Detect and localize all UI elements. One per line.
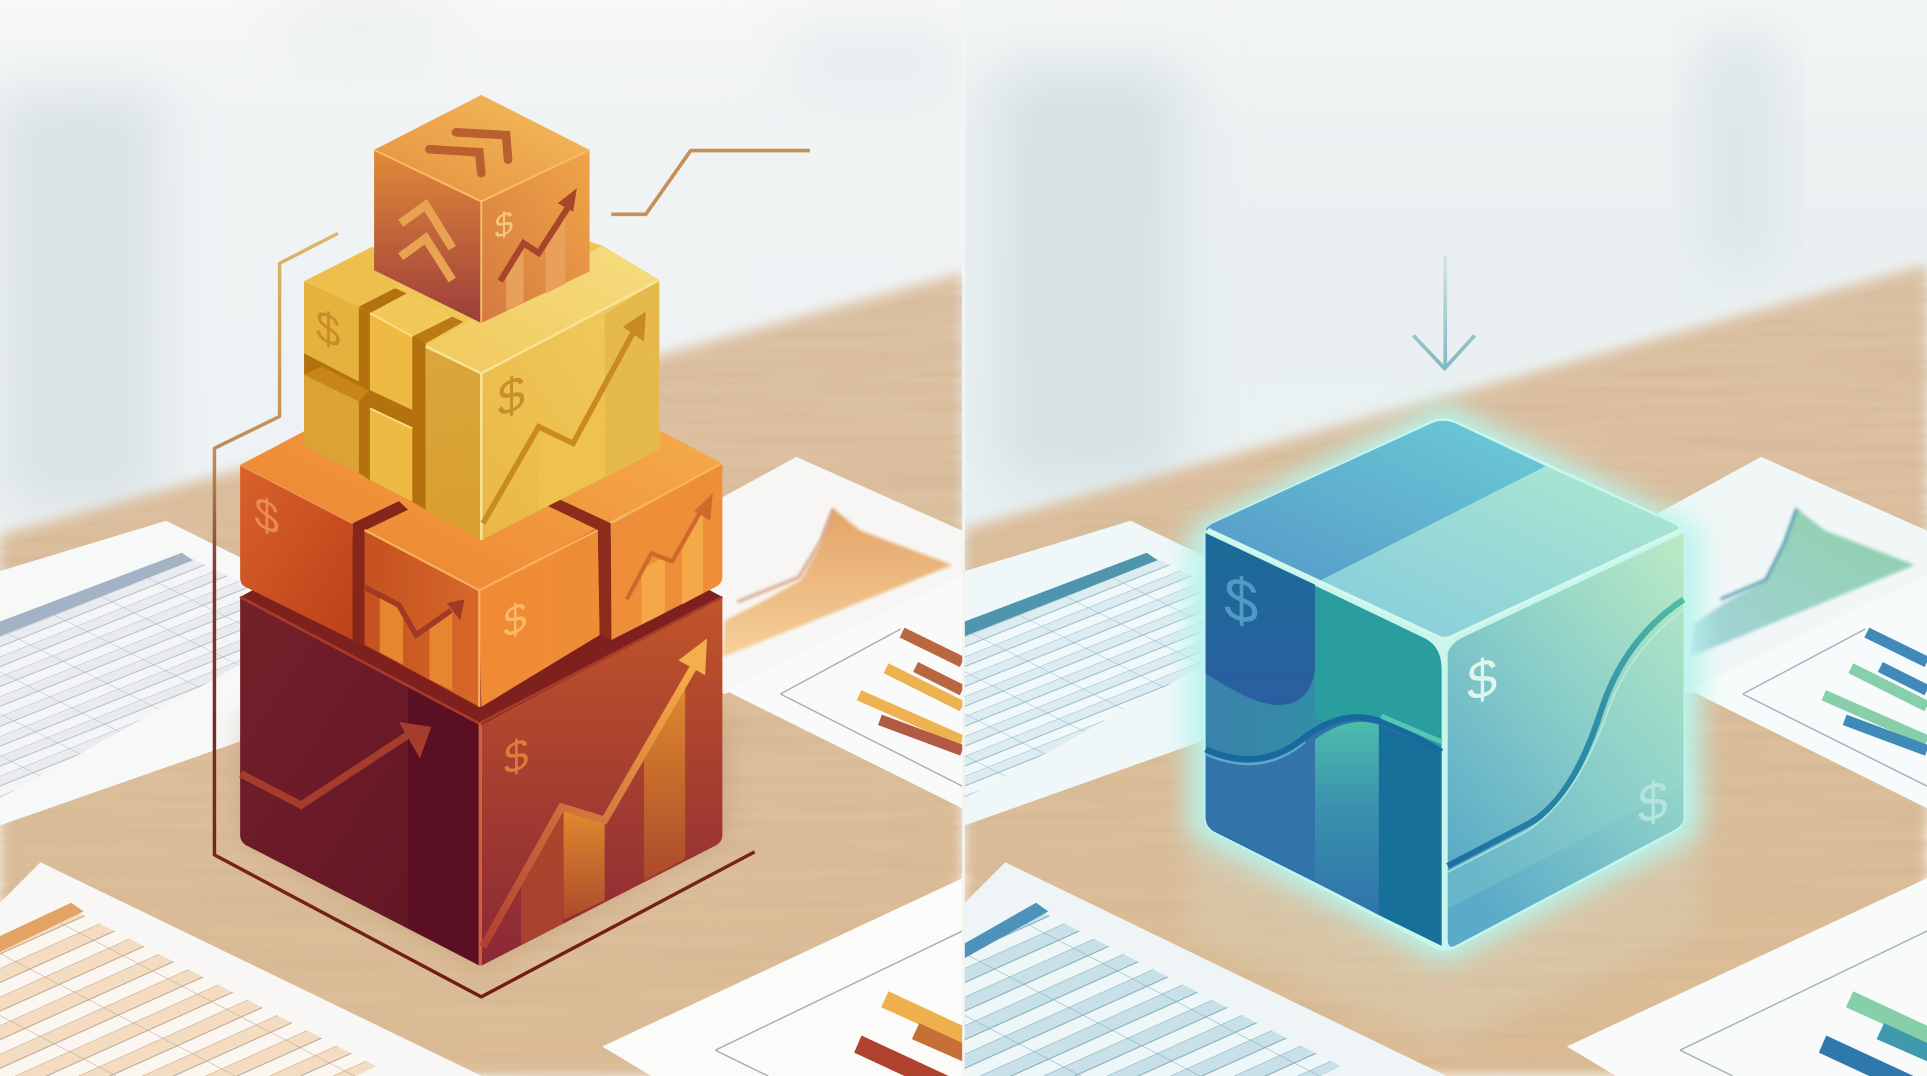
tower shadow: [240, 712, 728, 970]
chart: bars and arrow: [365, 587, 465, 690]
block gap: [548, 497, 611, 640]
block: top orange cube: [374, 95, 590, 323]
spreadsheet header band: [0, 553, 193, 636]
block: gold lower middle: [370, 408, 412, 502]
chart: gold rising arrow: [483, 312, 646, 523]
icon: dollar sign: $: [316, 298, 341, 359]
down arrow: [1413, 255, 1475, 368]
chart: right face arrow: [500, 188, 577, 311]
gold tier top surface: [304, 203, 659, 346]
area chart: [723, 509, 952, 657]
block tier: gold blocks: [304, 203, 659, 540]
bars: [854, 991, 962, 1076]
cube left face: [1206, 533, 1442, 946]
orange tier top surface: [240, 366, 721, 589]
icon: left chevrons: [401, 205, 452, 280]
paper: area chart sheet: [1653, 457, 1927, 694]
chart: left face arrow: [241, 722, 431, 805]
paper: bar chart sheet: [1690, 575, 1927, 808]
icon: dollar sign: $: [504, 727, 528, 785]
gold tier dark backing: [304, 307, 426, 510]
icon: dollar sign: $: [498, 363, 525, 429]
block: gold upper left: [304, 247, 395, 382]
panel: unified cube scene: [965, 0, 1927, 1076]
block: orange left: [240, 465, 353, 640]
block: gold lower left: [304, 367, 369, 473]
icon: dollar sign: $: [1467, 645, 1497, 713]
bars: [1824, 633, 1927, 750]
bars: [1819, 991, 1927, 1076]
background: blurred wall: [965, 0, 1927, 577]
cube top face: [1206, 421, 1678, 637]
icon: dollar sign: $: [503, 593, 527, 648]
icon: dollar sign: $: [1638, 768, 1668, 836]
paper: bottom bar chart sheet: [602, 878, 962, 1076]
table header band: [0, 903, 84, 952]
bracket line: upper right: [611, 151, 810, 214]
block tier: orange blocks: [240, 338, 722, 707]
cube edges: [1208, 529, 1681, 640]
icon: top chevrons: [430, 132, 508, 173]
background: wooden table: [965, 264, 1927, 1076]
block: orange right: [611, 463, 722, 640]
paper: left spreadsheet: [0, 520, 252, 826]
cube right face: [1448, 533, 1684, 947]
paper: blue table sheet: [965, 862, 1446, 1076]
chart: right face bars and rising arrow: [483, 638, 707, 947]
cube silhouette: [1204, 418, 1685, 951]
panel: stacked blocks scene: [0, 0, 964, 1076]
paper: bottom bar chart sheet: [1567, 878, 1927, 1076]
gold gap: [412, 317, 463, 343]
icon: dollar sign: $: [495, 203, 513, 247]
block gap: [353, 501, 408, 646]
block: bottom red cube: [239, 529, 723, 966]
table header band: [965, 903, 1048, 958]
chart: bars and arrow: [627, 493, 713, 625]
divider: [962, 0, 965, 1076]
bars: [859, 633, 962, 750]
background: blurred wall: [0, 0, 964, 577]
area chart: [1690, 509, 1915, 657]
bracket line: left and bottom: [214, 233, 755, 997]
block: gold middle: [370, 294, 452, 410]
background: wooden table: [0, 270, 964, 1076]
icon: dollar sign: $: [254, 485, 279, 546]
icon: dollar sign: $: [1224, 564, 1258, 639]
gold gap: [359, 288, 407, 313]
paper: bar chart sheet: [725, 575, 962, 808]
block: gold large cube: [426, 246, 659, 540]
block: orange front: [365, 530, 600, 707]
paper: orange table sheet: [0, 862, 482, 1076]
block: glowing teal cube: [1204, 418, 1685, 951]
cube glow: [1186, 403, 1702, 1044]
spreadsheet header band: [965, 553, 1158, 636]
paper: left spreadsheet: [965, 521, 1352, 825]
paper: area chart sheet: [688, 457, 962, 694]
